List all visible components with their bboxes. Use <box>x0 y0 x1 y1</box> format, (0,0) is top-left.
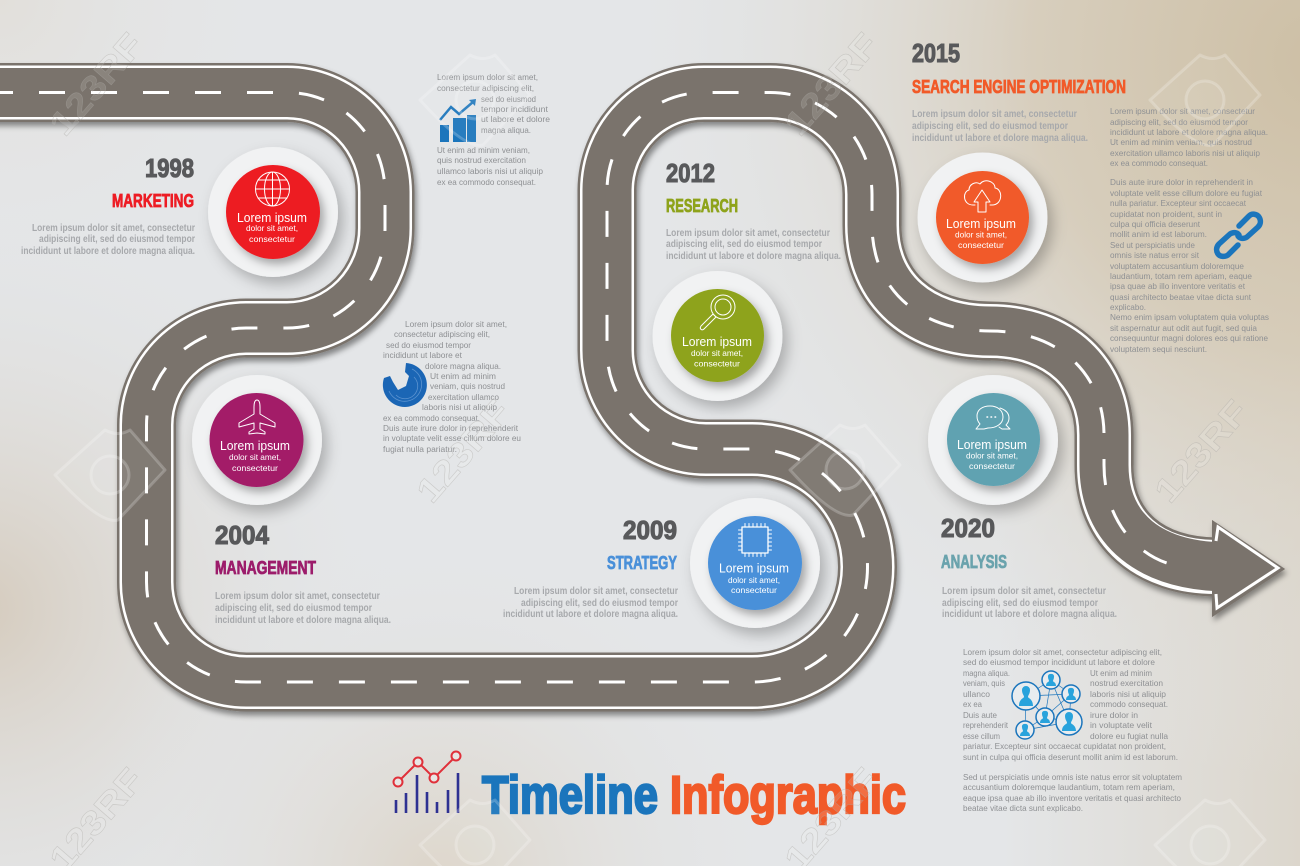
description: Lorem ipsum dolor sit amet, consectetur <box>942 585 1106 597</box>
text block with chain icon: ipsa quae ab illo inventore veritatis et <box>1110 281 1246 291</box>
text block with radial chart icon: exercitation ullamco <box>428 392 499 402</box>
badge purple: consectetur <box>232 463 278 473</box>
description: Lorem ipsum dolor sit amet, consectetur <box>514 585 678 597</box>
year 2020: 2020 <box>941 513 995 543</box>
milestone 2004 management <box>192 375 391 626</box>
badge green: consectetur <box>694 358 740 368</box>
description: Lorem ipsum dolor sit amet, consectetur <box>666 227 830 239</box>
text block with chain icon: ex ea commodo consequat. <box>1110 158 1208 168</box>
text block with chain icon: nulla pariatur. Excepteur sint occaecat <box>1110 198 1247 208</box>
description: incididunt ut labore et dolore magna aliqua. <box>503 608 678 620</box>
badge blue: dolor sit amet, <box>728 575 780 585</box>
text block with bar chart icon: sed do eiusmod <box>481 94 536 104</box>
description <box>942 585 1117 620</box>
text block with radial chart icon: laboris nisi ut aliquip <box>422 402 497 412</box>
text block with chain icon: omnis iste natus error sit <box>1110 250 1200 260</box>
text block with network icon: in voluptate velit <box>1090 720 1153 730</box>
road with arrow <box>0 92 1285 682</box>
text block with bar chart icon: ut labore et dolore <box>481 114 550 124</box>
text block with bar chart icon: magna aliqua. <box>481 125 531 135</box>
text block with chain icon: Duis aute irure dolor in reprehenderit in <box>1110 177 1253 187</box>
badge blue: consectetur <box>731 585 777 595</box>
text block with chain icon: adipiscing elit, sed do eiusmod tempor <box>1110 117 1248 127</box>
text block with network icon: irure dolor in <box>1090 710 1138 720</box>
description <box>215 590 391 626</box>
text block with radial chart icon: dolore magna aliqua. <box>425 361 501 371</box>
icon: chain link <box>1217 214 1260 256</box>
text block with bar chart icon: ullamco laboris nisi ut aliquip <box>437 166 543 176</box>
description: adipiscing elit, sed do eiusmod tempor <box>666 238 822 250</box>
text block with network icon: Lorem ipsum dolor sit amet, consectetur adipiscing elit, <box>963 647 1162 657</box>
milestone 2015 seo <box>912 38 1126 282</box>
heading research: RESEARCH <box>666 195 738 216</box>
badge teal: Lorem ipsum <box>957 438 1027 452</box>
heading management: MANAGEMENT <box>215 557 317 578</box>
text block with network icon: reprehenderit <box>963 720 1009 730</box>
text block with bar chart icon <box>437 72 550 187</box>
description: incididunt ut labore et dolore magna aliqua. <box>666 250 841 262</box>
text block with network icon: Ut enim ad minim <box>1090 668 1152 678</box>
badge green: Lorem ipsum <box>682 335 752 349</box>
text block with network icon: laboris nisi ut aliquip <box>1090 689 1166 699</box>
text block with network icon: sed do eiusmod tempor incididunt ut labore et dolore <box>963 657 1155 667</box>
year 2009: 2009 <box>623 515 677 545</box>
badge red: consectetur <box>249 234 295 244</box>
badge red: dolor sit amet, <box>246 223 298 233</box>
description: adipiscing elit, sed do eiusmod tempor <box>912 120 1068 132</box>
description <box>666 227 841 262</box>
text block with network icon: ullanco <box>963 689 990 699</box>
text block with bar chart icon: tempor incididunt <box>481 104 549 114</box>
text block with chain icon: exercitation ullamco laboris nisi ut aliquip <box>1110 148 1260 158</box>
description: Lorem ipsum dolor sit amet, consectetur <box>912 108 1077 120</box>
text block with chain icon: voluptatem sequi nesciunt. <box>1110 344 1207 354</box>
text block with network icon: sunt in culpa qui officia deserunt mollit anim id est laborum. <box>963 752 1178 762</box>
milestone 2020 analysis <box>928 375 1117 620</box>
description <box>503 585 678 620</box>
text block with chain icon: laudantium, totam rem aperiam, eaque <box>1110 271 1252 281</box>
text block with radial chart icon: fugiat nulla pariatur. <box>383 444 457 454</box>
text block with radial chart icon: Duis aute irure dolor in reprehenderit <box>383 423 519 433</box>
badge purple <box>192 375 322 505</box>
badge red <box>208 147 338 277</box>
icon: line and bar chart <box>394 752 460 813</box>
badge orange: consectetur <box>958 240 1004 250</box>
description: incididunt ut labore et dolore magna aliqua. <box>215 614 391 626</box>
heading marketing: MARKETING <box>112 190 194 211</box>
description <box>912 108 1088 144</box>
badge orange <box>918 152 1048 282</box>
year 2012: 2012 <box>666 158 715 188</box>
text: 123RF <box>409 393 518 510</box>
text block with radial chart icon: Ut enim ad minim <box>430 371 496 381</box>
text block with chain icon: Ut enim ad minim veniam, quis nostrud <box>1110 137 1252 147</box>
icon: bar chart <box>440 99 476 142</box>
badge teal: consectetur <box>969 461 1015 471</box>
text: 123RF <box>42 26 151 143</box>
text block with network icon: beatae vitae dicta sunt explicabo. <box>963 803 1083 813</box>
badge green <box>652 271 782 401</box>
icon: radial chart <box>383 363 427 407</box>
text block with network icon: commodo consequat. <box>1090 699 1168 709</box>
text block with chain icon: Sed ut perspiciatis unde <box>1110 240 1195 250</box>
text block with bar chart icon: ex ea commodo consequat. <box>437 177 536 187</box>
heading analysis: ANALYSIS <box>941 551 1007 572</box>
text block with chain icon: mollit anim id est laborum. <box>1110 229 1207 239</box>
description: incididunt ut labore et dolore magna aliqua. <box>942 608 1117 620</box>
badge blue: Lorem ipsum <box>719 562 789 576</box>
heading strategy: STRATEGY <box>607 552 677 573</box>
text block with chain icon: consequuntur magni dolores eos qui ratione <box>1110 333 1268 343</box>
description: adipiscing elit, sed do eiusmod tempor <box>942 597 1098 609</box>
text block with network icon: Duis aute <box>963 710 997 720</box>
text block with radial chart icon: incididunt ut labore et <box>383 350 463 360</box>
text block with chain icon: quasi architecto beatae vitae dicta sunt <box>1110 292 1252 302</box>
badge purple: dolor sit amet, <box>229 452 281 462</box>
text block with radial chart icon: in voluptate velit esse cillum dolore eu <box>383 433 521 443</box>
badge orange: Lorem ipsum <box>946 217 1016 231</box>
text block with chain icon: Nemo enim ipsam voluptatem quia voluptas <box>1110 312 1269 322</box>
icon: chat bubbles <box>976 406 1010 429</box>
title word Timeline: Timeline <box>482 766 658 825</box>
badge purple: Lorem ipsum <box>220 439 290 453</box>
description: Lorem ipsum dolor sit amet, consectetur <box>215 590 380 602</box>
title word Infographic: Infographic <box>670 766 906 825</box>
badge green: dolor sit amet, <box>691 348 743 358</box>
text block with network icon: dolore eu fugiat nulla <box>1090 731 1168 741</box>
text block with chain icon: voluptatem accusantium doloremque <box>1110 261 1244 271</box>
year 1998: 1998 <box>145 153 194 183</box>
icon: chip <box>738 524 772 556</box>
text block with network icon: Sed ut perspiciatis unde omnis iste natus error sit voluptatem <box>963 772 1182 782</box>
text block with chain icon: culpa qui officia deserunt <box>1110 219 1201 229</box>
text block with chain icon: Lorem ipsum dolor sit amet, consectetur <box>1110 106 1255 116</box>
text block with network icon: ex ea <box>963 699 982 709</box>
description: adipiscing elit, sed do eiusmod tempor <box>521 597 678 609</box>
text block with bar chart icon: Ut enim ad minim veniam, <box>437 145 530 155</box>
milestone 2009 strategy <box>503 498 820 628</box>
text block with network icon: pariatur. Excepteur sint occaecat cupidatat non proident, <box>963 741 1166 751</box>
text block with bar chart icon: quis nostrud exercitation <box>437 155 526 165</box>
badge teal: dolor sit amet, <box>966 450 1018 460</box>
text block with network icon: magna aliqua. <box>963 668 1010 678</box>
icon: people network <box>1012 671 1082 739</box>
heading search engine optimization: SEARCH ENGINE OPTIMIZATION <box>912 76 1126 97</box>
text block with network icon: nostrud exercitation <box>1090 678 1163 688</box>
text: 123RF <box>777 26 886 143</box>
text block with network icon: eaque ipsa quae ab illo inventore veritatis et quasi architecto <box>963 793 1181 803</box>
icon: plane <box>239 400 275 434</box>
text block with radial chart icon: sed do eiusmod tempor <box>386 340 471 350</box>
badge blue <box>690 498 820 628</box>
text block with chain icon: explicabo. <box>1110 302 1146 312</box>
text block with network icon: esse cillum <box>963 731 1000 741</box>
icon: cloud upload <box>964 181 1001 212</box>
text block with chain icon <box>1110 106 1269 354</box>
text block with chain icon: voluptate velit esse cillum dolore eu fugiat <box>1110 188 1263 198</box>
text block with radial chart icon: Lorem ipsum dolor sit amet, <box>405 319 507 329</box>
description: adipiscing elit, sed do eiusmod tempor <box>39 233 195 245</box>
milestone 2012 research <box>652 158 841 401</box>
description: incididunt ut labore et dolore magna aliqua. <box>912 132 1088 144</box>
milestone 1998 marketing <box>21 147 338 277</box>
text block with chain icon: incididunt ut labore et dolore magna aliqua. <box>1110 127 1268 137</box>
text block with network icon <box>963 647 1182 813</box>
text block with radial chart icon: ex ea commodo consequat. <box>383 413 480 423</box>
text block with network icon: veniam, quis <box>963 678 1005 688</box>
text: 123RF <box>1147 393 1256 510</box>
text block with radial chart icon <box>383 319 521 454</box>
badge teal <box>928 375 1058 505</box>
text block with chain icon: cupidatat non proident, sunt in <box>1110 209 1222 219</box>
text block with bar chart icon: consectetur adipiscing elit, <box>437 83 534 93</box>
description: incididunt ut labore et dolore magna aliqua. <box>21 245 195 257</box>
text block with network icon: accusantium doloremque laudantium, totam rem aperiam, <box>963 782 1175 792</box>
icon: globe <box>256 172 290 206</box>
year 2004: 2004 <box>215 520 270 550</box>
text block with bar chart icon: Lorem ipsum dolor sit amet, <box>437 72 538 82</box>
text block with radial chart icon: veniam, quis nostrud <box>430 381 505 391</box>
description: adipiscing elit, sed do eiusmod tempor <box>215 602 372 614</box>
text block with chain icon: sit aspernatur aut odit aut fugit, sed quia <box>1110 323 1257 333</box>
badge orange: dolor sit amet, <box>955 230 1007 240</box>
title with chart icon <box>394 752 906 825</box>
badge red: Lorem ipsum <box>237 211 307 225</box>
description: Lorem ipsum dolor sit amet, consectetur <box>32 222 195 234</box>
icon: magnifier <box>700 295 735 330</box>
description <box>21 222 195 257</box>
year 2015: 2015 <box>912 38 960 68</box>
text block with radial chart icon: consectetur adipiscing elit, <box>394 329 490 339</box>
